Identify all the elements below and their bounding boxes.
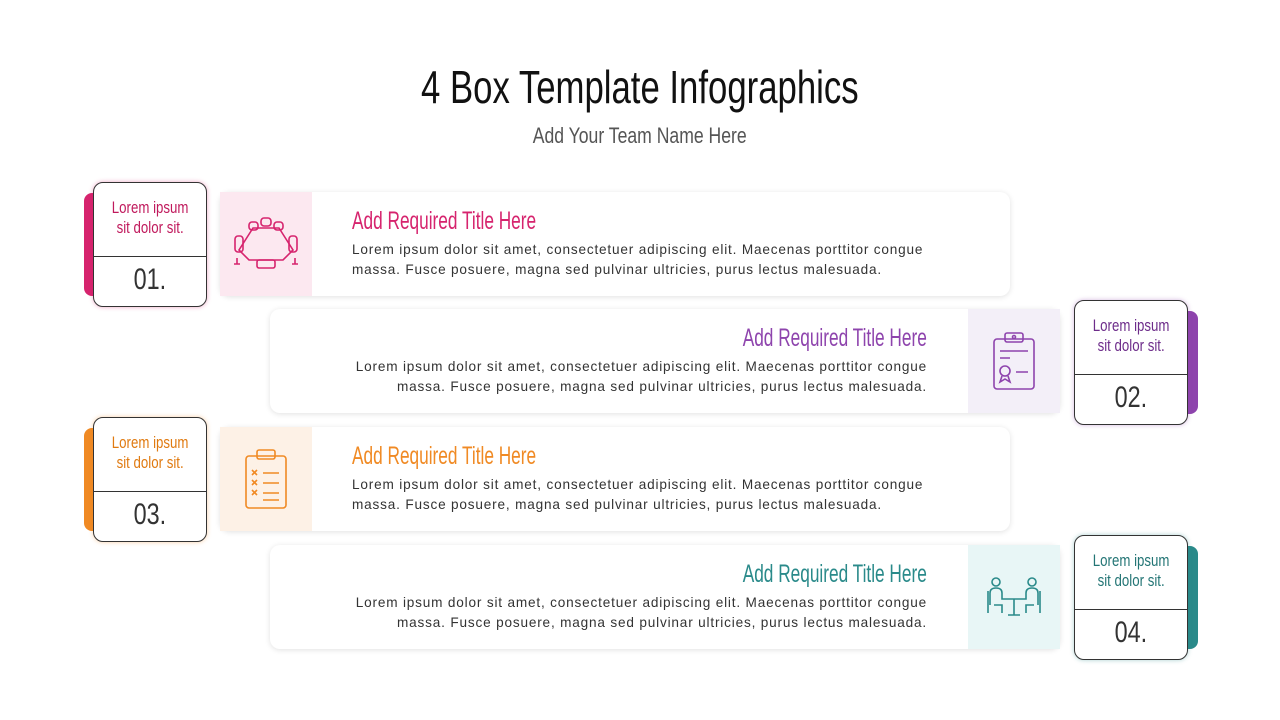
number box 3: 03.: [134, 498, 166, 531]
card 4: [270, 545, 1060, 649]
text 2: massa. Fusce posuere, magna sed pulvinar ultricies, purus lectus malesuada.: [397, 379, 927, 394]
title: 4 Box Template Infographics: [421, 61, 859, 113]
number box 4: Lorem ipsum: [1093, 551, 1169, 570]
number box 1: [84, 179, 210, 310]
number box 4: [1071, 532, 1198, 663]
number box 2: [1071, 297, 1198, 428]
number box 1: Lorem ipsum: [112, 198, 188, 217]
number box 1: 01.: [134, 263, 166, 296]
icon: conference table: [220, 192, 312, 296]
text 4: [356, 595, 927, 630]
card 2: [270, 309, 1060, 413]
number box 3: [84, 414, 210, 545]
text 4: Lorem ipsum dolor sit amet, consectetuer adipiscing elit. Maecenas porttitor congue: [356, 595, 927, 610]
row 4: [268, 532, 1198, 663]
row 3: [84, 414, 1012, 545]
text 4: massa. Fusce posuere, magna sed pulvinar ultricies, purus lectus malesuada.: [397, 615, 927, 630]
number box 2: sit dolor sit.: [1097, 336, 1165, 355]
number box 3: Lorem ipsum: [112, 433, 188, 452]
number box 1: sit dolor sit.: [116, 218, 184, 237]
text 1: massa. Fusce posuere, magna sed pulvinar ultricies, purus lectus malesuada.: [352, 262, 882, 277]
row 1: [84, 179, 1012, 310]
heading 2: Add Required Title Here: [743, 324, 927, 352]
text 1: [352, 242, 923, 277]
text 3: massa. Fusce posuere, magna sed pulvinar ultricies, purus lectus malesuada.: [352, 497, 882, 512]
heading 4: Add Required Title Here: [743, 560, 927, 588]
text 1: Lorem ipsum dolor sit amet, consectetuer adipiscing elit. Maecenas porttitor congue: [352, 242, 923, 257]
text 3: [352, 477, 923, 512]
card 3: [220, 427, 1010, 531]
number box 4: sit dolor sit.: [1097, 571, 1165, 590]
icon: meeting: [968, 545, 1060, 649]
number box 2: 02.: [1115, 381, 1147, 414]
number box 3: sit dolor sit.: [116, 453, 184, 472]
text 2: [356, 359, 927, 394]
number box 2: Lorem ipsum: [1093, 316, 1169, 335]
heading 3: Add Required Title Here: [352, 442, 536, 470]
subtitle: Add Your Team Name Here: [533, 123, 747, 148]
text 2: Lorem ipsum dolor sit amet, consectetuer adipiscing elit. Maecenas porttitor congue: [356, 359, 927, 374]
icon: certificate clipboard: [968, 309, 1060, 413]
card 1: [220, 192, 1010, 296]
icon: checklist: [220, 427, 312, 531]
heading 1: Add Required Title Here: [352, 207, 536, 235]
row 2: [268, 297, 1198, 428]
number box 4: 04.: [1115, 616, 1147, 649]
text 3: Lorem ipsum dolor sit amet, consectetuer adipiscing elit. Maecenas porttitor congue: [352, 477, 923, 492]
